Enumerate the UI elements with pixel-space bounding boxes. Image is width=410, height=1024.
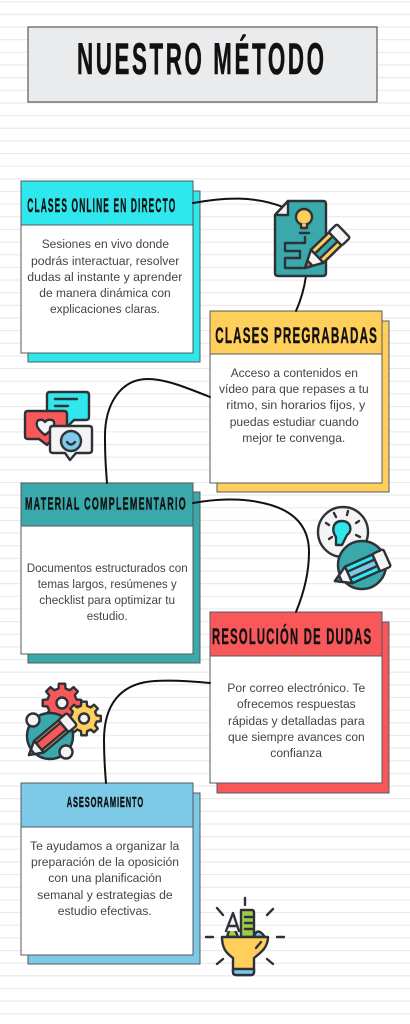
body text: dudas al instante y aprender (27, 270, 182, 284)
panel: resolución de dudas (210, 612, 389, 793)
body text: ritmo, sin horarios fijos, y (226, 398, 366, 412)
connector: material complementario to resolución de dudas (193, 499, 309, 612)
body text: semanal y estrategias de (37, 888, 173, 902)
body text: Sesiones en vivo donde (42, 237, 169, 251)
body text: ofrecemos respuestas (237, 697, 356, 711)
icon: gears and pencil (24, 684, 101, 761)
body text: estudio. (87, 609, 128, 623)
header (21, 181, 193, 225)
title: NUESTRO MÉTODO (77, 34, 324, 84)
body text: puedas estudiar cuando (230, 415, 359, 429)
connector: clases online to document icon (193, 199, 283, 207)
icon: lightbulb and pencil in circles (318, 507, 391, 590)
body text: explicaciones claras. (50, 302, 160, 316)
body text: Por correo electrónico. Te (227, 681, 366, 695)
icon: document with lightbulb and pencil (275, 201, 350, 276)
body text: Te ayudamos a organizar la (30, 839, 180, 853)
header: CLASES PREGRABADAS (215, 323, 377, 348)
body text (227, 681, 366, 760)
title (28, 27, 377, 102)
body text: temas largos, resúmenes y (38, 577, 178, 591)
connector: resolución de dudas to asesoramiento (104, 681, 210, 783)
body text: de manera dinámica con (39, 286, 171, 300)
body text: que siempre avances con (228, 730, 365, 744)
body text (27, 561, 188, 623)
icon: funnel with ideas (206, 898, 284, 975)
header: CLASES ONLINE EN DIRECTO (27, 195, 175, 217)
header (210, 612, 382, 656)
body text (219, 366, 369, 445)
panel: clases online en directo (21, 181, 200, 362)
header (21, 783, 193, 827)
header: RESOLUCIÓN DE DUDAS (212, 623, 371, 649)
connector: document icon to clases pregrabadas (296, 276, 306, 311)
body text: rápidas y detalladas para (228, 714, 365, 728)
header (21, 483, 193, 526)
panel: material complementario (21, 483, 200, 663)
body text: confianza (270, 746, 322, 760)
header: MATERIAL COMPLEMENTARIO (25, 493, 186, 513)
body text: con una planificación (48, 871, 162, 885)
body text: preparación de la oposición (31, 855, 179, 869)
body text: checklist para optimizar tu (39, 593, 175, 607)
connector: clases pregrabadas to material complementario (105, 379, 210, 483)
body text: mejor te convenga. (242, 431, 345, 445)
header (210, 311, 382, 354)
body text: podrás interactuar, resolver (31, 254, 179, 268)
body text: Documentos estructurados con (27, 561, 188, 575)
body text: Acceso a contenidos en (231, 366, 358, 380)
panel: asesoramiento (21, 783, 200, 964)
body text: vídeo para que repases a tu (219, 382, 369, 396)
body text (27, 237, 182, 316)
panel: clases pregrabadas (210, 311, 389, 492)
icon: chat bubbles (25, 392, 92, 460)
body text (30, 839, 180, 918)
header: ASESORAMIENTO (67, 793, 143, 811)
body text: estudio efectivas. (58, 904, 152, 918)
